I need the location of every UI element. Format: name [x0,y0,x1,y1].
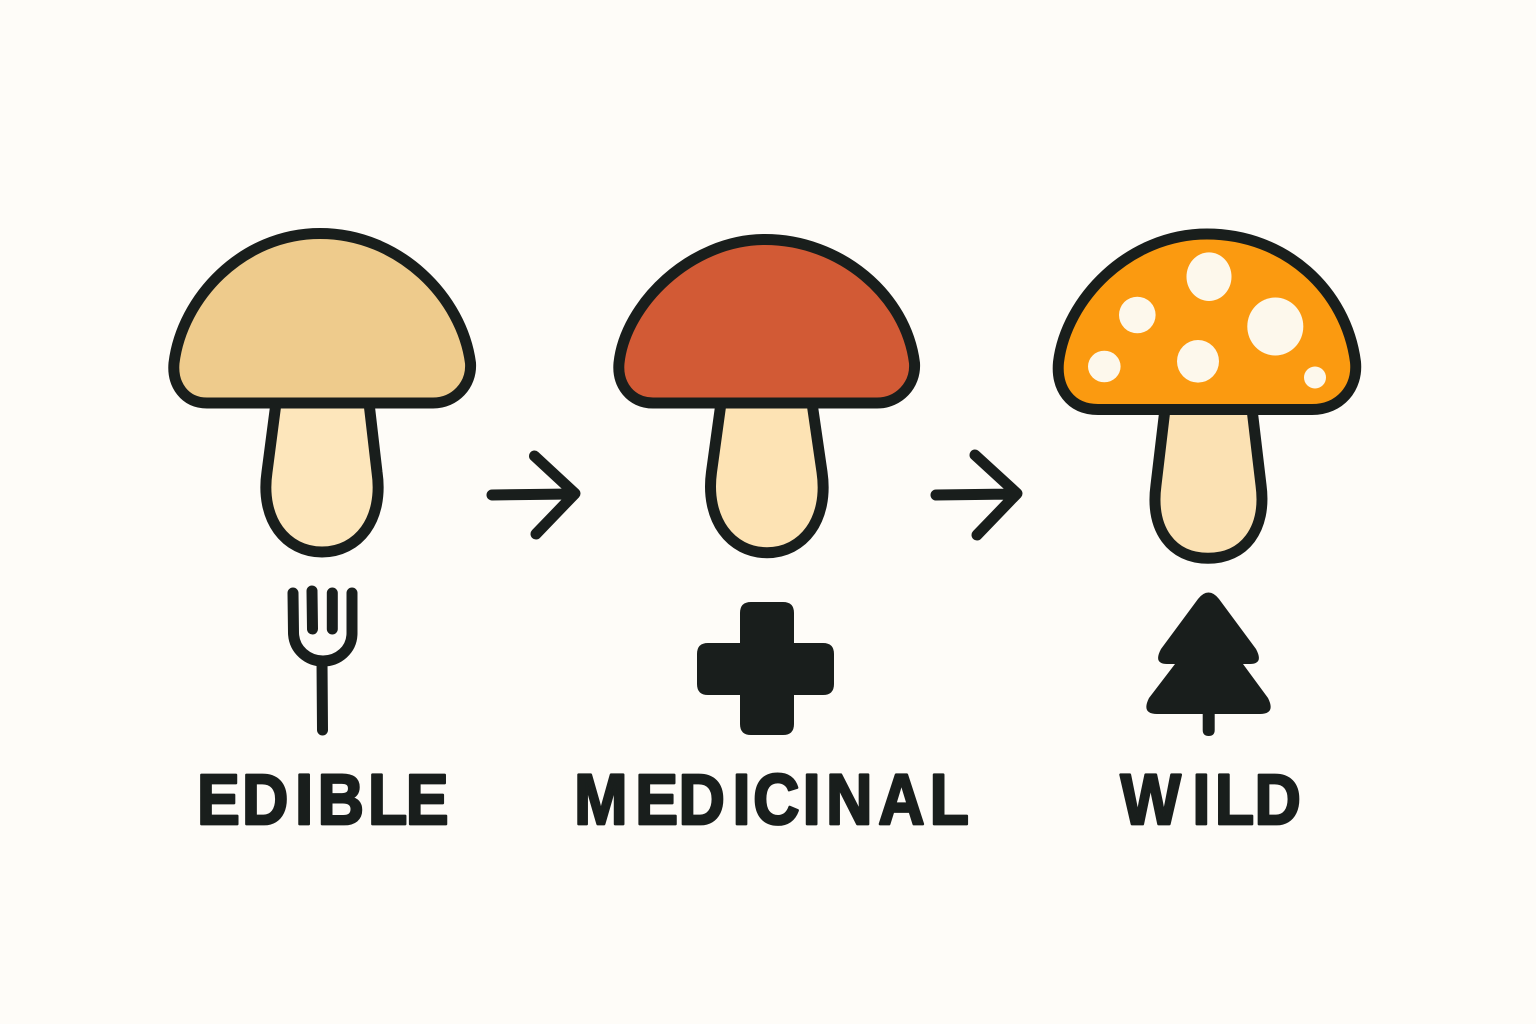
wild mushroom [1058,234,1356,558]
label: edible: EDIBLE [197,761,449,840]
label: wild: WILD [1121,761,1301,840]
wild mushroom spots [1088,252,1326,388]
icon: pine tree [1146,592,1271,736]
wild mushroom body [1058,234,1356,558]
label: medicinal: MEDICINAL [574,761,969,840]
arrow: medicinal to wild [936,455,1017,535]
icon: medical cross [697,602,834,735]
edible mushroom [174,234,471,552]
arrow: edible to medicinal [492,456,575,534]
icon: fork [293,591,352,730]
medicinal mushroom [619,240,915,553]
